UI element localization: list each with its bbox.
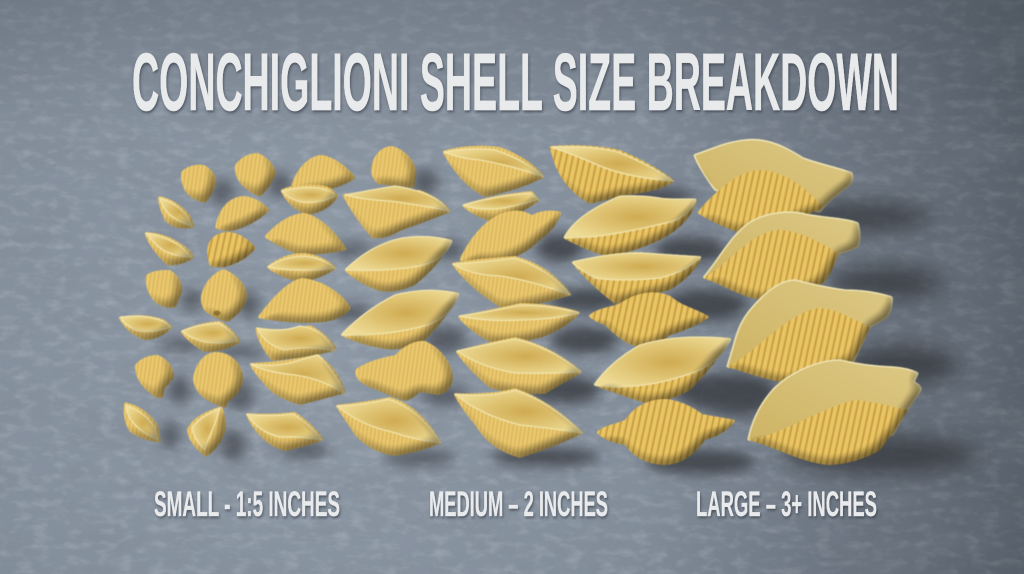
small ridged shell 16 — [257, 278, 351, 323]
shell 3 — [571, 252, 702, 304]
medium shells group — [442, 146, 584, 458]
cast shadows under the shells — [158, 169, 978, 475]
shell 4 — [588, 292, 710, 347]
medium shell 2 — [461, 191, 540, 223]
small open shell 19 — [180, 321, 241, 352]
small shell 10 — [207, 232, 256, 267]
small shell 23 — [193, 352, 243, 408]
shell 2 — [563, 196, 697, 256]
medium open shell 17 — [340, 290, 460, 350]
shell 1 — [549, 145, 675, 204]
medium shell 5 — [457, 303, 581, 343]
small shell 22 — [135, 355, 174, 398]
large shell 3 — [727, 280, 892, 383]
small open shell 7 — [280, 185, 338, 215]
small open shell 18 — [118, 315, 173, 340]
medium shell 1 — [442, 146, 545, 197]
small shell 13 — [146, 270, 182, 308]
medium shell 6 — [455, 337, 583, 394]
small shells group — [118, 146, 460, 457]
small open shell 5 — [158, 196, 195, 229]
shell 5 — [593, 337, 732, 403]
small shell 11 — [264, 213, 347, 255]
small open shell 25 — [124, 402, 161, 442]
medium-large shells group — [549, 145, 736, 465]
small open shell 15 — [266, 253, 337, 282]
small shell 3 — [291, 155, 356, 192]
small open shell 20 — [255, 325, 337, 361]
large shell 1 ribbed body — [697, 170, 823, 232]
small shell 6 — [215, 196, 270, 231]
small half-open shell 24 — [249, 354, 346, 405]
large shell 2 ribbed body — [703, 230, 837, 300]
large shell 4 — [748, 360, 921, 465]
small shell 1 — [181, 165, 216, 203]
medium shell 3 — [459, 211, 562, 262]
large shell 3 ribbed body — [727, 308, 870, 383]
size label: small: SMALL - 1:5 INCHES — [154, 485, 340, 524]
medium small shell 8 — [342, 186, 451, 238]
large shell 1 back flap — [694, 140, 853, 212]
medium open shell 12 — [344, 236, 453, 292]
small shell 4 — [371, 146, 416, 188]
large shells group — [694, 140, 921, 465]
medium shell 7 — [453, 388, 584, 458]
large shell 1 — [694, 140, 853, 232]
small open shell 27 — [245, 412, 324, 451]
size label: medium: MEDIUM – 2 INCHES — [429, 485, 608, 524]
small open shell 9 — [144, 232, 194, 265]
small shell 2 — [235, 153, 276, 197]
large shell 2 — [703, 212, 860, 300]
large shell 4 back flap — [748, 360, 921, 445]
small open shell 26 — [187, 406, 226, 457]
medium open shell 28 — [335, 397, 442, 456]
large shell 2 back flap — [703, 212, 860, 283]
small shell 14 with hole — [201, 269, 247, 322]
large shell 4 ribbed body — [748, 400, 908, 465]
medium lobed shell 21 — [355, 341, 453, 401]
shell 6 — [596, 399, 736, 465]
medium shell 4 — [451, 256, 572, 310]
large shell 3 back flap — [727, 280, 892, 370]
